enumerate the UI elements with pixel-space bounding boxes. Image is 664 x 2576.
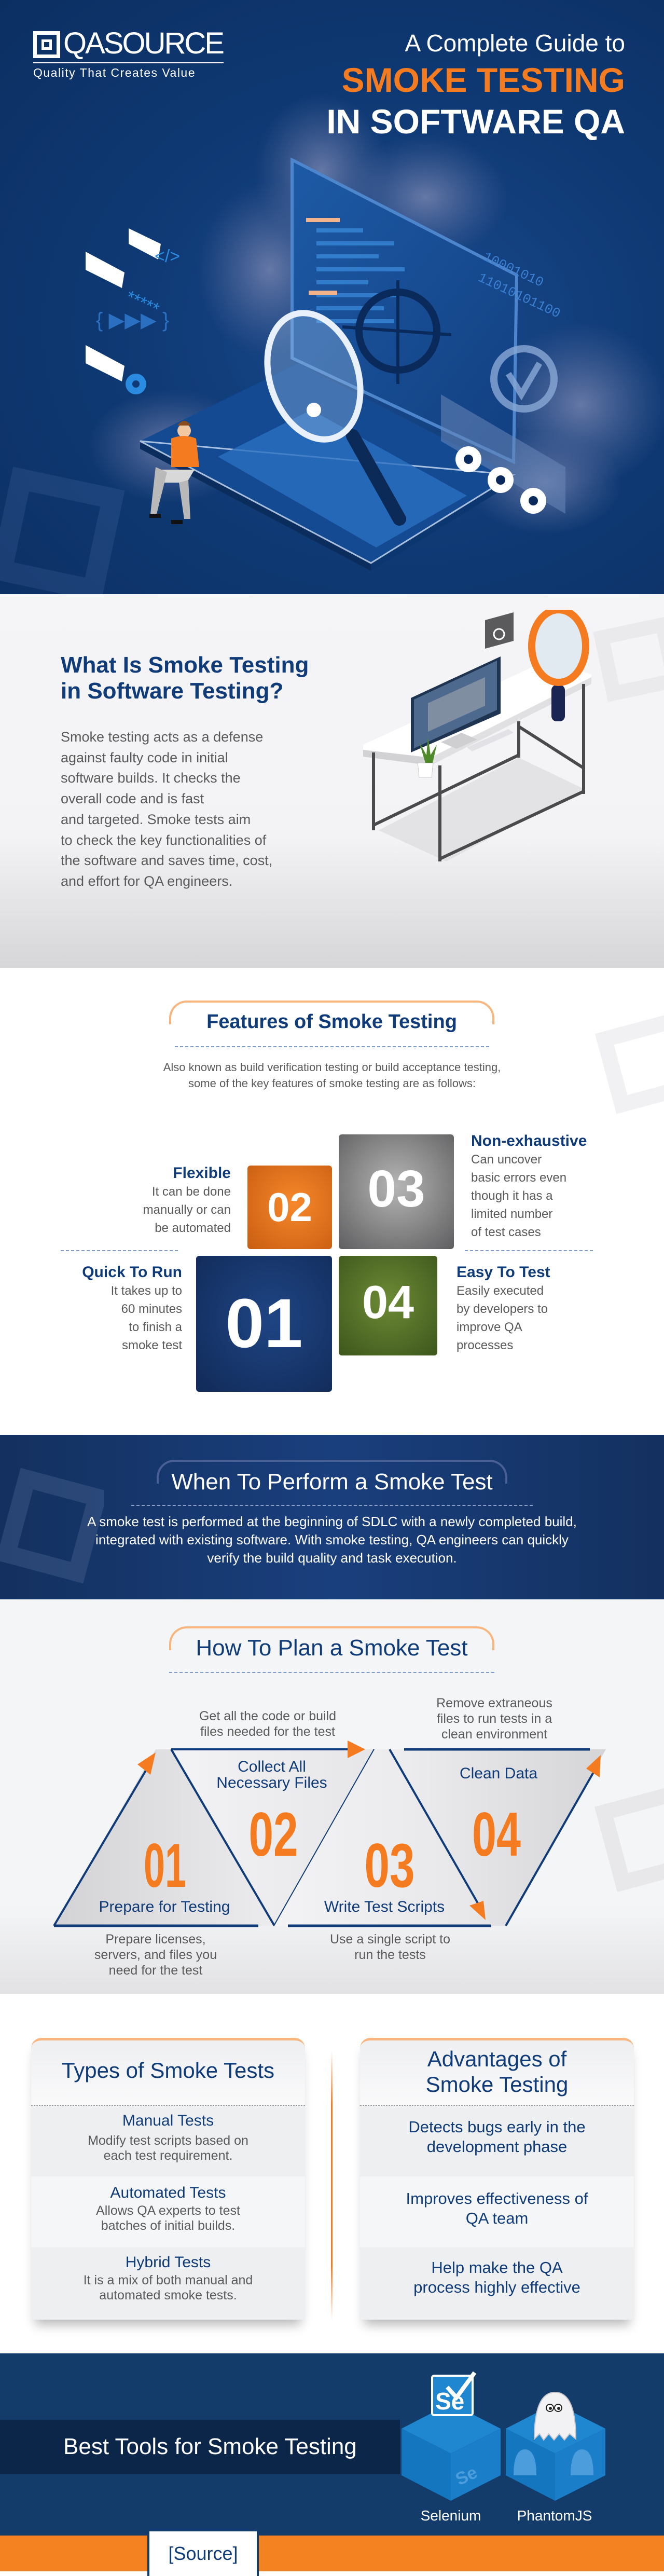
feature: easy to test: processes xyxy=(457,1338,513,1352)
row: detects bugs: Detects bugs early in the xyxy=(408,2118,586,2136)
plan description: prepare: servers, and files you xyxy=(94,1948,217,1962)
feature: non-exhaustive xyxy=(471,1132,587,1239)
heading xyxy=(169,1001,494,1033)
paragraph xyxy=(87,1514,577,1566)
row: manual: each test requirement. xyxy=(104,2148,232,2163)
heading: When To Perform a Smoke Test xyxy=(171,1469,493,1495)
magnifier xyxy=(252,301,399,519)
feature: easy to test: by developers to xyxy=(457,1302,548,1316)
row: detects bugs xyxy=(360,2106,634,2176)
triangle 04: 04 xyxy=(472,1800,521,1869)
heading: Advantages of xyxy=(427,2047,566,2071)
watermark xyxy=(593,617,664,702)
section: when to perform xyxy=(0,1435,664,1599)
code icons left: </> xyxy=(155,246,180,266)
triangle 03: 03 xyxy=(364,1831,415,1900)
icon: selenium cube xyxy=(402,2372,605,2501)
feature: flexible: manually or can xyxy=(143,1203,231,1217)
code icons left: ***** xyxy=(123,287,162,319)
paragraph: the software and saves time, cost, xyxy=(61,853,272,868)
feature: quick to run xyxy=(82,1264,182,1352)
heading xyxy=(157,1460,507,1495)
triangle 02: 02 xyxy=(249,1800,298,1869)
heading xyxy=(169,1626,494,1661)
check circle xyxy=(494,349,554,409)
laptop screen xyxy=(292,160,563,462)
plan description: scripts xyxy=(330,1932,450,1962)
footer orange band xyxy=(0,2536,664,2571)
icon: selenium cube: Se xyxy=(452,2462,480,2489)
plan description: clean xyxy=(436,1696,552,1742)
plan description: prepare: need for the test xyxy=(109,1963,202,1978)
row: help: Help make the QA xyxy=(431,2258,563,2277)
paragraph: A smoke test is performed at the beginning of SDLC with a newly completed build, xyxy=(87,1514,577,1529)
feature: easy to test xyxy=(457,1264,550,1352)
paragraph xyxy=(61,729,272,889)
row: automated: Automated Tests xyxy=(110,2184,226,2201)
icon: desk illustration xyxy=(363,610,591,861)
feature: easy to test: Easy To Test xyxy=(457,1264,550,1281)
feature: easy to test: improve QA xyxy=(457,1320,522,1334)
source box: [Source] xyxy=(168,2543,238,2564)
watermark xyxy=(594,1788,664,1892)
row: manual: Modify test scripts based on xyxy=(88,2133,248,2148)
triangle 02: Collect All xyxy=(238,1758,306,1775)
plan description: collect: Get all the code or build xyxy=(199,1709,336,1723)
feature: flexible xyxy=(143,1164,231,1235)
feature box 02 xyxy=(247,1166,332,1249)
hero illustration xyxy=(0,103,658,594)
feature: flexible: Flexible xyxy=(173,1164,231,1182)
heading: Smoke Testing xyxy=(426,2072,568,2097)
feature box 02: 02 xyxy=(267,1184,312,1230)
triangle 04: Clean Data xyxy=(460,1765,537,1782)
plant xyxy=(418,763,433,777)
laptop screen: 11010101100 xyxy=(476,270,563,322)
divider line xyxy=(331,2051,333,2320)
section: features of smoke testing xyxy=(0,968,664,1435)
triangle 01: Prepare for Testing xyxy=(99,1898,230,1915)
monitor xyxy=(411,656,501,752)
watermark xyxy=(0,1468,104,1584)
intro text: Also known as build verification testing or build acceptance testing, xyxy=(163,1061,501,1074)
row: improves: Improves effectiveness of xyxy=(406,2189,588,2208)
paragraph: overall code and is fast xyxy=(61,791,204,806)
triangle 02 xyxy=(171,1741,375,1926)
feature box 03 xyxy=(339,1134,454,1249)
feature box 04 xyxy=(339,1256,437,1355)
row: automated: batches of initial builds. xyxy=(101,2218,235,2233)
label: selenium: Selenium xyxy=(421,2508,481,2524)
plan description: scripts: Use a single script to xyxy=(330,1932,450,1947)
paragraph: and targeted. Smoke tests aim xyxy=(61,812,251,827)
paragraph: to check the key functionalities of xyxy=(61,832,266,848)
triangle 02: Necessary Files xyxy=(216,1774,327,1791)
paragraph: against faulty code in initial xyxy=(61,750,228,765)
title band: Best Tools for Smoke Testing xyxy=(63,2434,357,2459)
plan diagram xyxy=(53,1741,606,1927)
label: phantomjs: PhantomJS xyxy=(517,2508,592,2524)
plan description: clean: Remove extraneous xyxy=(436,1696,552,1710)
plan description: prepare: Prepare licenses, xyxy=(105,1932,206,1947)
feature box 03: 03 xyxy=(367,1160,425,1218)
plan description: clean: files to run tests in a xyxy=(437,1711,552,1726)
plan description: scripts: run the tests xyxy=(354,1948,426,1962)
plan description: collect xyxy=(199,1709,336,1739)
row: hybrid: automated smoke tests. xyxy=(99,2288,237,2303)
paragraph: and effort for QA engineers. xyxy=(61,873,232,889)
heading: How To Plan a Smoke Test xyxy=(196,1635,468,1661)
icon: phantomjs cube xyxy=(506,2392,605,2501)
code icons left xyxy=(86,228,180,394)
heading: in Software Testing? xyxy=(61,678,283,704)
heading: What Is Smoke Testing xyxy=(61,652,309,678)
icon: selenium cube: Se xyxy=(435,2388,464,2415)
row: manual xyxy=(31,2106,305,2176)
row: manual: Manual Tests xyxy=(122,2112,214,2129)
triangle 04 xyxy=(390,1749,606,1926)
heading: Features of Smoke Testing xyxy=(206,1011,457,1033)
code icons left: { ▶▶▶ } xyxy=(96,309,169,332)
laptop screen: 10001010 xyxy=(481,249,546,291)
plan description: prepare xyxy=(94,1932,217,1978)
feature: flexible: It can be done xyxy=(152,1185,231,1199)
row: automated xyxy=(31,2176,305,2247)
section: types and advantages xyxy=(0,1994,664,2353)
feature: non-exhaustive: limited number xyxy=(471,1207,552,1221)
feature: quick to run: smoke test xyxy=(122,1338,182,1352)
logo wordmark: QASOURCE xyxy=(63,26,223,60)
heading xyxy=(426,2047,568,2097)
hero section xyxy=(0,0,664,594)
feature box 04: 04 xyxy=(362,1277,414,1328)
feature: non-exhaustive: Non-exhaustive xyxy=(471,1132,587,1149)
source box xyxy=(147,2529,259,2576)
intro text xyxy=(163,1061,501,1090)
person xyxy=(149,421,199,524)
feature box 01 xyxy=(196,1256,332,1392)
feature: non-exhaustive: though it has a xyxy=(471,1189,552,1203)
hero title: A Complete Guide to xyxy=(405,30,625,57)
triangle 01 xyxy=(54,1749,274,1926)
triangle 03: Write Test Scripts xyxy=(324,1898,445,1915)
row: hybrid xyxy=(31,2247,305,2320)
section: how to plan xyxy=(0,1599,664,1994)
hero title: SMOKE TESTING xyxy=(342,61,625,99)
hero title: IN SOFTWARE QA xyxy=(326,102,625,141)
clouds xyxy=(88,93,664,535)
row: improves xyxy=(360,2176,634,2247)
logo mark xyxy=(33,31,60,58)
panel: advantages xyxy=(360,2038,634,2320)
feature: quick to run: Quick To Run xyxy=(82,1264,182,1281)
paragraph: software builds. It checks the xyxy=(61,770,241,786)
hero title xyxy=(326,30,625,141)
gear box xyxy=(485,612,514,649)
feature: flexible: be automated xyxy=(155,1221,231,1235)
row: hybrid: It is a mix of both manual and xyxy=(84,2273,253,2287)
feature: easy to test: Easily executed xyxy=(457,1284,544,1298)
section: best tools xyxy=(0,2353,664,2536)
feature: non-exhaustive: of test cases xyxy=(471,1225,541,1239)
row: hybrid: Hybrid Tests xyxy=(126,2254,211,2271)
heading xyxy=(61,652,309,704)
logo xyxy=(33,26,224,79)
row: detects bugs: development phase xyxy=(427,2137,567,2156)
row: help: process highly effective xyxy=(413,2278,580,2296)
feature: quick to run: 60 minutes xyxy=(121,1302,182,1316)
bug pill xyxy=(441,394,565,514)
triangle 03 xyxy=(274,1749,491,1926)
triangle 01: 01 xyxy=(144,1831,186,1900)
paragraph: Smoke testing acts as a defense xyxy=(61,729,263,745)
feature: quick to run: It takes up to xyxy=(111,1284,182,1298)
feature box 01: 01 xyxy=(225,1285,303,1362)
section: what is smoke testing xyxy=(0,594,664,968)
row: improves: QA team xyxy=(466,2209,528,2227)
watermark xyxy=(595,1015,664,1114)
title band xyxy=(0,2420,400,2474)
tagline: Quality That Creates Value xyxy=(33,66,196,79)
paragraph: integrated with existing software. With smoke testing, QA engineers can quickly xyxy=(95,1532,569,1547)
feature: non-exhaustive: Can uncover xyxy=(471,1153,542,1167)
background logo watermark xyxy=(2,479,113,590)
plan description: collect: files needed for the test xyxy=(200,1724,335,1739)
feature: non-exhaustive: basic errors even xyxy=(471,1171,566,1185)
plan description: clean: clean environment xyxy=(441,1727,547,1742)
paragraph: verify the build quality and task execution. xyxy=(207,1550,457,1566)
intro text: some of the key features of smoke testing are as follows: xyxy=(188,1077,476,1090)
magnifier xyxy=(551,685,565,721)
feature: quick to run: to finish a xyxy=(129,1320,182,1334)
panel: types of smoke tests xyxy=(31,2038,305,2320)
heading: Types of Smoke Tests xyxy=(62,2058,274,2082)
row: help xyxy=(360,2247,634,2320)
laptop base xyxy=(140,363,514,571)
row: automated: Allows QA experts to test xyxy=(96,2203,240,2218)
